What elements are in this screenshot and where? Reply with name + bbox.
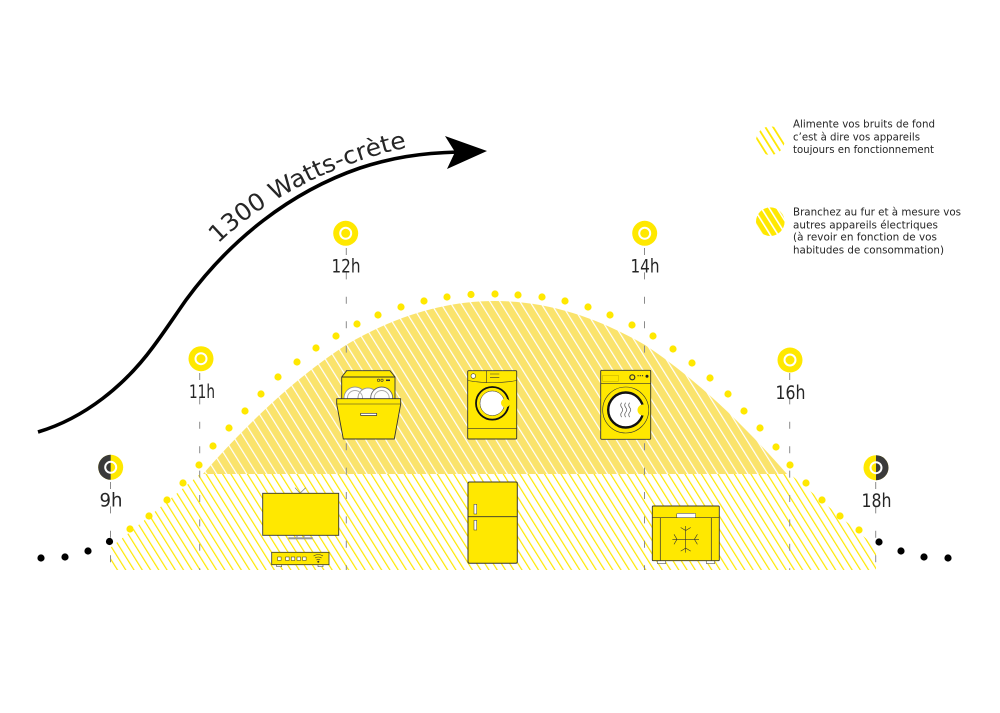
icon: television <box>263 488 339 539</box>
upper hatched area: extra appliances <box>203 301 787 474</box>
legend text: other appliances: habitudes de consommation) <box>793 244 944 256</box>
dotted sun path: yellow dots <box>126 290 863 534</box>
legend text: background consumption <box>793 119 935 156</box>
dotted path: black night dots <box>37 538 952 562</box>
icon: refrigerator <box>468 482 517 563</box>
legend text: background consumption: c’est à dire vos appareils <box>793 131 920 143</box>
legend text: background consumption: Alimente vos bruits de fond <box>793 119 935 131</box>
hour labels: 18h <box>862 491 892 512</box>
hour labels: 9h <box>100 491 122 512</box>
sun marker 14h <box>632 221 657 246</box>
sun marker 9h <box>98 455 123 480</box>
hour labels: 16h <box>776 383 806 404</box>
hour guide lines <box>110 248 876 570</box>
icon: chest freezer <box>652 506 719 564</box>
legend swatch: background consumption <box>756 126 785 155</box>
legend text: other appliances: autres appareils électriques <box>793 219 938 231</box>
legend text: other appliances: (à revoir en fonction de vos <box>793 232 937 244</box>
hour labels: 11h <box>189 382 215 403</box>
icon: tumble dryer <box>601 370 651 439</box>
sun marker 16h <box>778 348 802 372</box>
icon: wifi router <box>272 552 329 567</box>
sun marker 11h <box>188 346 214 371</box>
icon: washing machine <box>468 371 517 439</box>
legend text: other appliances: Branchez au fur et à mesure vos <box>793 207 961 219</box>
icon: dishwasher <box>337 371 401 439</box>
legend text: background consumption: toujours en fonctionnement <box>793 144 934 156</box>
lower hatched area: background consumption <box>110 474 876 570</box>
sun marker 18h <box>864 455 888 480</box>
legend swatch: other appliances <box>756 207 785 236</box>
arrow label: 1300 Watts-crète <box>208 136 406 242</box>
hour labels: 12h <box>332 257 360 278</box>
legend text: other appliances <box>793 207 961 256</box>
arrow: power rising <box>38 136 487 432</box>
hour labels <box>100 257 892 512</box>
sun marker 12h <box>333 221 358 246</box>
hour labels: 14h <box>630 257 660 278</box>
